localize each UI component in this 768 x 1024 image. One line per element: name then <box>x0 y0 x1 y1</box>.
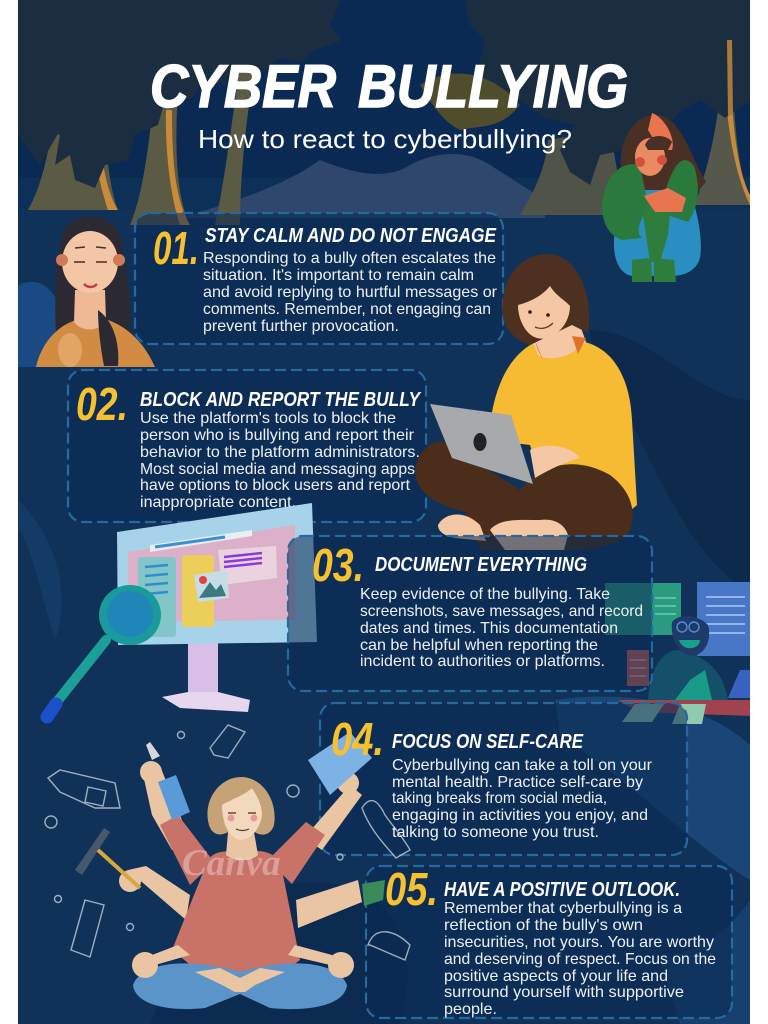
meditating hands <box>132 952 158 978</box>
panel 5 body text <box>444 900 716 1018</box>
panel 1 body text: prevent further provocation. <box>203 318 399 335</box>
screen cards <box>138 557 176 637</box>
magnifier <box>52 640 106 708</box>
feet <box>195 968 285 992</box>
watermark: Canva <box>182 843 281 884</box>
shoes <box>632 258 652 282</box>
number 01: 01. <box>153 222 199 274</box>
trousers <box>415 442 633 550</box>
monitor stand <box>188 640 218 698</box>
hair <box>502 254 589 345</box>
heading 02: BLOCK AND REPORT THE BULLY <box>140 389 421 411</box>
title: CYBER <box>150 53 336 120</box>
panel 1 body text: comments. Remember, not engaging can <box>203 301 491 318</box>
panel 2 box <box>68 370 426 522</box>
panel 3 body text: can be helpful when reporting the <box>360 637 598 654</box>
heading 03: DOCUMENT EVERYTHING <box>375 554 587 576</box>
hands <box>140 761 162 783</box>
face <box>222 788 262 840</box>
panel 5 body text: and deserving of respect. Focus on the <box>444 951 716 968</box>
panel 3 body text: Keep evidence of the bullying. Take <box>360 586 610 603</box>
panel 5 body text: people. <box>444 1001 497 1018</box>
panel 5 body text: surround yourself with supportive <box>444 984 684 1001</box>
panel 4 body text: talking to someone you trust. <box>392 824 599 841</box>
panel 2 body text: inappropriate content. <box>140 494 296 511</box>
heading 01: STAY CALM AND DO NOT ENGAGE <box>205 225 497 247</box>
heading 05: HAVE A POSITIVE OUTLOOK. <box>444 879 680 901</box>
panel 3 body text: screenshots, save messages, and record <box>360 603 643 620</box>
panel 4 box <box>320 703 687 855</box>
title <box>150 53 628 120</box>
panel 2 body text: Use the platform's tools to block the <box>140 410 396 427</box>
number 04: 04. <box>331 713 384 765</box>
hair <box>207 777 275 835</box>
neck <box>226 832 258 860</box>
torso <box>172 850 300 985</box>
panel 5 body text: positive aspects of your life and <box>444 968 668 985</box>
lower arms <box>128 866 190 920</box>
legs <box>133 963 347 1009</box>
subtitle: How to react to cyberbullying? <box>198 124 572 154</box>
panel 2 body text <box>140 410 420 511</box>
squeegee <box>75 828 110 875</box>
illustration: girl with laptop <box>415 254 637 550</box>
hand <box>530 446 580 478</box>
illustration: monitor with magnifier <box>47 503 317 717</box>
illustration: woman at desk with screens <box>605 582 753 724</box>
panel 4 body text: taking breaks from social media, <box>392 790 607 807</box>
panel 5 body text: reflection of the bully's own <box>444 917 643 934</box>
green pattern <box>643 195 670 262</box>
panel 1 box <box>135 213 503 344</box>
spray bottle <box>158 775 190 820</box>
illustration: woman with closed eyes <box>36 216 155 367</box>
monitor screen <box>117 503 317 645</box>
panel 1 body text: and avoid replying to hurtful messages or <box>203 284 498 301</box>
panel 3 box <box>288 536 652 691</box>
panel 3 body text: incident to authorities or platforms. <box>360 653 605 670</box>
panel 5 box <box>366 866 732 1018</box>
illustration: crying girl hugging knees <box>602 113 706 282</box>
panel 1 body text: Responding to a bully often escalates the <box>203 250 496 267</box>
panel 5 body text: Remember that cyberbullying is a <box>444 900 682 917</box>
face <box>518 286 570 339</box>
panel 3 body text: dates and times. This documentation <box>360 620 618 637</box>
tree trunks <box>28 72 750 225</box>
hand on head <box>648 113 673 150</box>
face <box>635 138 665 176</box>
panel 1 body text: situation. It's important to remain calm <box>203 267 474 284</box>
illustration: multi-armed meditating woman <box>75 732 385 1009</box>
mountain <box>180 154 545 218</box>
panel 2 body text: behavior to the platform administrators. <box>140 444 420 461</box>
forest and mountain scenery <box>18 0 750 225</box>
left foot <box>438 514 486 541</box>
upper arms <box>142 766 190 850</box>
tree canopy <box>18 0 750 188</box>
panel 3 body text <box>360 586 643 670</box>
number 03: 03. <box>312 539 364 591</box>
blue jumpsuit <box>614 190 701 276</box>
right foot <box>490 520 568 550</box>
neck and collar <box>532 325 586 358</box>
hair <box>620 114 706 191</box>
panel 4 body text: mental health. Practice self-care by <box>392 774 643 791</box>
title: BULLYING <box>358 53 628 120</box>
panel 2 body text: Most social media and messaging apps <box>140 461 415 478</box>
book <box>308 732 372 795</box>
panel 4 body text: Cyberbullying can take a toll on your <box>392 757 653 774</box>
panel 5 body text: insecurities, not yours. You are worthy <box>444 934 714 951</box>
panel 1 body text <box>203 250 498 335</box>
green sleeves <box>602 164 648 240</box>
panel 4 body text <box>392 757 653 841</box>
sweater <box>490 340 637 515</box>
panel 2 body text: have options to block users and report <box>140 477 411 494</box>
number 02: 02. <box>76 378 128 430</box>
heading 04: FOCUS ON SELF-CARE <box>392 731 584 753</box>
number 05: 05. <box>385 863 438 915</box>
monitor base <box>162 692 250 712</box>
panel 2 body text: person who is bullying and report their <box>140 427 415 444</box>
panel 4 body text: engaging in activities you enjoy, and <box>392 807 648 824</box>
illustration: outlined cleaning items <box>45 725 410 960</box>
laptop <box>430 404 533 484</box>
hugging hand <box>644 188 686 212</box>
panel 1 heading group <box>153 222 497 274</box>
